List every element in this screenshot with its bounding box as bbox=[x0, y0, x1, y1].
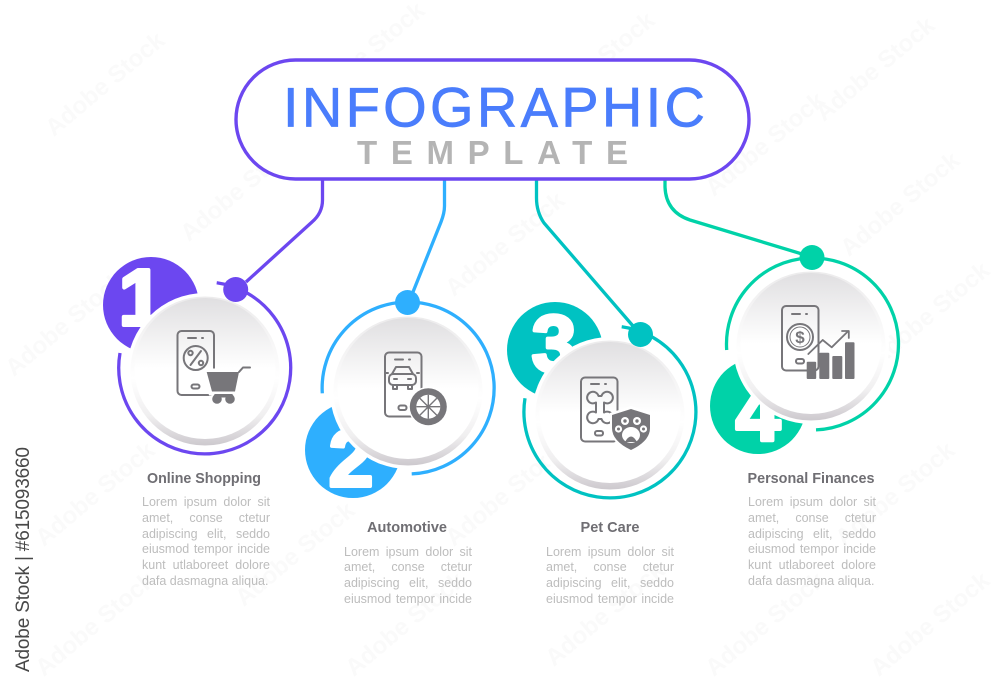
text block 1: Lorem ipsum dolor sit bbox=[142, 495, 270, 509]
connector dot 2 bbox=[395, 290, 420, 315]
heading: Online Shopping: Online Shopping bbox=[147, 470, 261, 487]
stock credit text: Adobe Stock | #615093660 bbox=[13, 447, 34, 672]
text block 4: eiusmod tempor incide bbox=[748, 542, 876, 556]
text: Adobe Stock bbox=[30, 566, 161, 682]
heading: Pet Care: Pet Care bbox=[580, 519, 640, 536]
text block 2: Lorem ipsum dolor sit bbox=[344, 544, 472, 558]
heading: Personal Finances: Personal Finances bbox=[748, 470, 874, 487]
connector: title to step 1 bbox=[246, 179, 322, 282]
subheading: TEMPLATE: TEMPLATE bbox=[357, 134, 628, 171]
number badge 3: 3 bbox=[532, 299, 576, 388]
connector: title to step 2 bbox=[413, 179, 444, 292]
disc 3 bbox=[532, 337, 688, 493]
text: Adobe Stock bbox=[700, 86, 831, 202]
text block 4: adipiscing elit, seddo bbox=[748, 527, 876, 541]
ring 1 bbox=[119, 283, 291, 454]
connector dot 4 bbox=[800, 245, 824, 270]
ring 3 bbox=[524, 327, 696, 498]
connector dot 3 bbox=[628, 322, 653, 347]
number badge 4: 4 bbox=[736, 368, 781, 457]
text block 1: amet, conse ctetur bbox=[142, 511, 270, 525]
text: Adobe Stock bbox=[440, 186, 571, 302]
panel: step 2 automotive bbox=[305, 290, 494, 610]
text: Adobe Stock bbox=[700, 566, 831, 682]
text block 3: amet, conse ctetur bbox=[546, 560, 674, 574]
text block 1: eiusmod tempor incide bbox=[142, 542, 270, 556]
connector: title to step 3 bbox=[536, 179, 633, 326]
heading: Automotive: Automotive bbox=[367, 519, 447, 536]
disc 1 bbox=[127, 293, 283, 449]
icon: phone with car and wheel bbox=[385, 352, 448, 427]
icon: phone with percent and cart bbox=[178, 331, 250, 404]
text: Adobe Stock bbox=[175, 131, 306, 247]
text: Adobe Stock bbox=[530, 6, 661, 122]
number badge 2 bbox=[305, 402, 401, 503]
connector: title to step 4 bbox=[665, 179, 802, 254]
text block 2: eiusmod tempor incide bbox=[344, 592, 472, 606]
number badge 4 bbox=[710, 358, 806, 457]
text: Adobe Stock bbox=[830, 436, 961, 552]
text block 4 bbox=[748, 495, 878, 595]
text: Adobe Stock bbox=[835, 146, 966, 262]
number badge 1 bbox=[103, 253, 199, 353]
text block 1: adipiscing elit, seddo bbox=[142, 527, 270, 541]
ring 2 bbox=[322, 302, 494, 474]
text block 1 bbox=[142, 495, 272, 595]
number badge 3 bbox=[507, 299, 603, 398]
text: Adobe Stock bbox=[865, 566, 996, 682]
icon: phone with dollar and growth chart bbox=[782, 306, 854, 379]
icon: phone with bone and paw shield bbox=[581, 378, 652, 452]
text block 2 bbox=[344, 544, 474, 610]
text block 4: Lorem ipsum dolor sit bbox=[748, 495, 876, 509]
panel: step 3 pet care bbox=[507, 299, 696, 610]
text block 3 bbox=[546, 544, 676, 610]
number badge 1: 1 bbox=[119, 253, 163, 342]
connector dot 1 bbox=[223, 277, 248, 302]
text block 1: dafa dasmagna aliqua. bbox=[142, 574, 268, 588]
text: Adobe Stock bbox=[230, 496, 361, 612]
text block 1: kunt utlaboreet dolore bbox=[142, 558, 270, 572]
text block 2: adipiscing elit, seddo bbox=[344, 576, 472, 590]
icon: phone with dollar and growth chart: $ bbox=[795, 328, 805, 347]
text block 3: Lorem ipsum dolor sit bbox=[546, 544, 674, 558]
text: Adobe Stock bbox=[810, 11, 941, 127]
text: Adobe Stock bbox=[300, 0, 431, 112]
disc 4 bbox=[733, 268, 889, 424]
text block 2: amet, conse ctetur bbox=[344, 560, 472, 574]
text: Adobe Stock bbox=[540, 556, 671, 672]
text block 4: kunt utlaboreet dolore bbox=[748, 558, 876, 572]
text: Adobe Stock bbox=[340, 566, 471, 682]
heading: INFOGRAPHIC: INFOGRAPHIC bbox=[283, 76, 705, 138]
panel: step 4 personal finances bbox=[710, 245, 898, 595]
text: Adobe Stock bbox=[40, 26, 171, 142]
text block 3: eiusmod tempor incide bbox=[546, 592, 674, 606]
disc 2 bbox=[330, 313, 486, 469]
text: Adobe Stock bbox=[30, 436, 161, 552]
number badge 2: 2 bbox=[329, 414, 373, 503]
text: Adobe Stock bbox=[440, 436, 571, 552]
text: Adobe Stock bbox=[0, 266, 131, 382]
text: Adobe Stock bbox=[865, 256, 996, 372]
text block 4: dafa dasmagna aliqua. bbox=[748, 574, 874, 588]
text block 4: amet, conse ctetur bbox=[748, 511, 876, 525]
panel: step 1 online shopping bbox=[103, 253, 291, 595]
title pill bbox=[236, 60, 749, 179]
ring 4 bbox=[726, 258, 898, 430]
text block 3: adipiscing elit, seddo bbox=[546, 576, 674, 590]
